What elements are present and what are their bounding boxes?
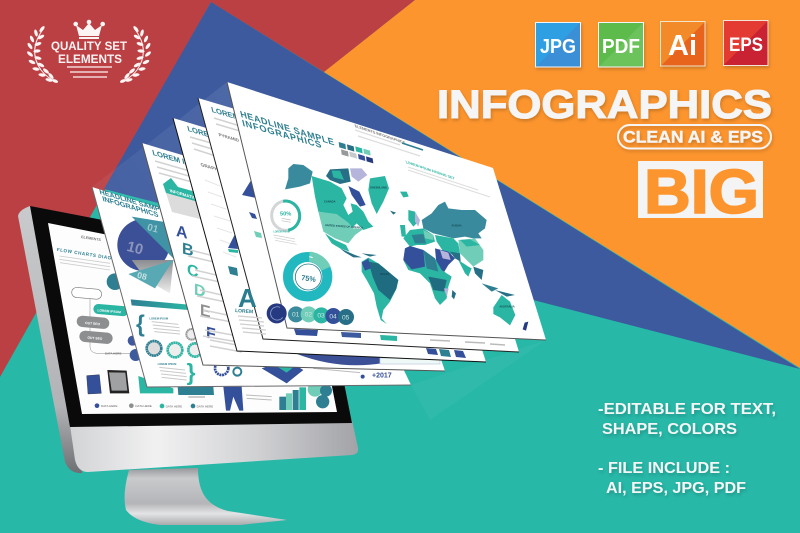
map labels: BRAZIL: [380, 272, 390, 276]
square markers: [249, 212, 257, 219]
screen content: [57, 235, 332, 411]
page 3 heading: LOREM IPSUM: [186, 124, 243, 149]
background: red triangle: [0, 0, 415, 377]
icon: JPG: JPG: [540, 36, 576, 58]
page 5 headline: HEADLINE SAMPLE: [239, 109, 336, 149]
pie chart: LOREM IPSUM: [158, 362, 177, 366]
numbered circles: 04: [329, 313, 337, 320]
background: blue triangle: [104, 2, 800, 369]
axis with ticks: [205, 180, 236, 257]
page 5 headline: INFOGRAPHICS: [241, 118, 323, 151]
map labels: [324, 186, 515, 308]
circles: [308, 382, 322, 397]
bar chart: [279, 397, 286, 410]
page 2: letters list: INFORMATION: [169, 188, 200, 202]
page 4: pyramid: PYRAMID: [218, 132, 240, 143]
monitor chin: [70, 420, 358, 472]
letter list A-F: C: [187, 261, 199, 282]
screen content: OUT SEO: [85, 321, 101, 326]
icon: EPS: [724, 20, 768, 66]
pie chart: +2017: [372, 372, 392, 379]
badge: quality set elements: [26, 20, 152, 84]
badge lines: [67, 67, 112, 77]
screen content: LOREM IPSUM: [97, 308, 121, 314]
feature list: AI, EPS, JPG, PDF: [606, 480, 746, 497]
screen content: OUT SEO: [87, 336, 103, 341]
pie chart: 01: [146, 222, 160, 236]
feature list: - FILE INCLUDE :: [598, 460, 730, 477]
numbered circles: [267, 303, 354, 325]
badge text: [51, 39, 128, 66]
letter list A-F: D: [194, 281, 206, 301]
donut: 50%: 50%: [280, 211, 291, 217]
boxes row: [380, 358, 440, 364]
letter list A-F: B: [182, 240, 194, 260]
information banner: [163, 178, 198, 202]
pie chart: 08: [136, 270, 148, 282]
feature list: -EDITABLE FOR TEXT,: [598, 401, 776, 418]
world map: [285, 164, 528, 331]
numbered circles: 05: [342, 314, 350, 321]
title: INFOGRAPHICS: INFOGRAPHICS: [437, 83, 772, 127]
pie chart: LOREM IPSUM: [149, 316, 169, 320]
pie chart: 10: [125, 239, 145, 258]
teal streak sheen: [411, 340, 546, 420]
icon: crown: [73, 20, 105, 39]
screen content: DATA HERE: [166, 404, 182, 408]
icon: PDF: [598, 22, 644, 67]
feature list: SHAPE, COLORS: [602, 421, 737, 438]
page 1: pie and gears: [92, 187, 411, 387]
letter list A-F: E: [200, 301, 211, 322]
page 1 headline: INFOGRAPHICS: [101, 194, 159, 219]
icon: desktop monitor: [18, 206, 358, 525]
device icons: [87, 375, 101, 394]
lorem label: LOREM: [235, 308, 253, 315]
subtitle pill: [618, 125, 771, 148]
letter list A-F: [176, 222, 216, 344]
monitor silver side: [18, 206, 82, 473]
page 4 heading: LOREM: [210, 105, 241, 122]
donut: 50%: [269, 199, 302, 244]
badge text: ELEMENTS: [58, 52, 122, 66]
badge text: QUALITY SET: [51, 39, 128, 53]
icon: JPG: [536, 22, 580, 67]
brace left: {: [136, 311, 145, 337]
screen content: FLOW CHARTS DIAG: [57, 247, 112, 261]
letter list A-F: F: [206, 324, 216, 344]
diamond: [262, 364, 303, 383]
screen content: DATA HERE: [101, 404, 117, 408]
feature list: [598, 401, 776, 497]
person figure: [223, 387, 243, 411]
donut: 75%: [288, 257, 327, 296]
monitor screen: [48, 223, 337, 414]
donut: 50%: LOREM IPSUM: [273, 232, 290, 234]
screen content: DATA HERE: [197, 404, 213, 408]
background: red upper wedge: [211, 0, 415, 72]
legend: [95, 403, 99, 408]
background: orange panel: [324, 0, 800, 368]
map labels: AUSTRALIA: [499, 304, 515, 308]
icon: PDF: PDF: [602, 36, 640, 58]
page 5 elements: ELEMENTS INFOGRAPHICS: [354, 123, 406, 145]
donut: 75%: 75%: [301, 273, 317, 284]
teal bar: [131, 299, 188, 310]
screen content: DATA HERE: [135, 404, 152, 408]
BIG label: BIG: [644, 158, 759, 227]
monitor black bezel: [30, 206, 352, 427]
page 2: letters list: [142, 143, 445, 371]
numbered circles: 01: [292, 312, 300, 319]
page 2 heading: LOREM IPSUM: [151, 148, 208, 173]
laurel left: [26, 25, 59, 84]
big letter A: A: [238, 283, 257, 313]
screen content: DATA HERE: [105, 352, 121, 356]
page 5: world map page: LOREM IPSUM FINDING SET: [405, 160, 456, 181]
file format icons: [536, 20, 768, 67]
laurel right: [119, 25, 152, 84]
icon: Ai: [660, 22, 705, 66]
navy arc: [297, 351, 424, 365]
page 3: chart: GRAPH: [200, 162, 219, 173]
page 3: chart: [173, 118, 486, 362]
gears: [147, 341, 161, 356]
australia: [493, 295, 528, 331]
pie chart: }: [187, 359, 196, 385]
colour swatches: [339, 142, 373, 163]
map labels: CANADA: [324, 200, 336, 204]
light streak sheen: [92, 82, 300, 387]
squares: [426, 348, 438, 355]
numbered circles: 03: [317, 313, 325, 320]
pie chart: [117, 217, 392, 385]
page 4: pyramid: [198, 98, 519, 352]
screen content: ELEMENTS: [81, 235, 102, 242]
letter list A-F: A: [176, 222, 188, 243]
icon: EPS: EPS: [729, 35, 763, 56]
numbered circles: 02: [305, 312, 312, 319]
pyramid: [242, 177, 256, 198]
monitor stand: [125, 468, 287, 525]
africa: [403, 246, 456, 305]
icon: Ai: Ai: [668, 30, 697, 62]
map labels: RUSSIA: [452, 224, 462, 228]
page 5: world map page: [227, 82, 546, 340]
triangle marker: [228, 234, 238, 249]
north america: [285, 164, 409, 257]
square marker: [228, 266, 238, 276]
gears navy: [215, 362, 228, 375]
stage tags: [294, 329, 505, 345]
map labels: GREENLAND: [370, 186, 387, 190]
page 1 headline: HEADLINE SAMPLE: [98, 187, 170, 216]
eurasia: [400, 202, 515, 297]
subtitle pill: CLEAN AI & EPS: [623, 128, 763, 146]
south america: [362, 258, 398, 324]
map labels: UNITED STATES OF AMERICA: [325, 223, 363, 230]
